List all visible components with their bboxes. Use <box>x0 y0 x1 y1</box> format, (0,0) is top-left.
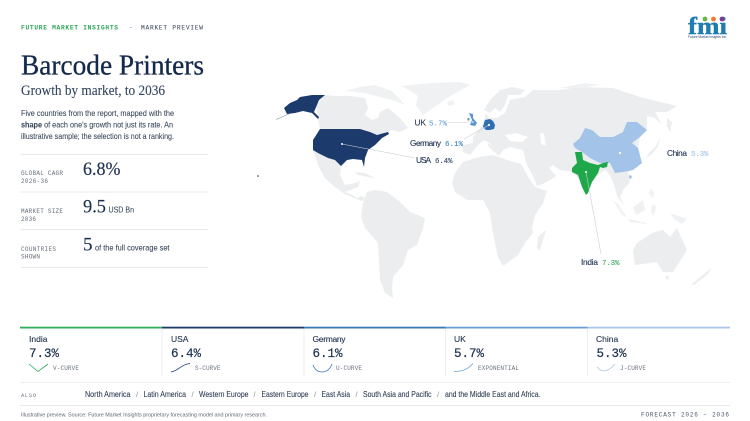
subtitle: Growth by market, to 2036 <box>21 83 165 99</box>
also-covered regions row <box>20 382 730 406</box>
intro text: Five countries from the report, mapped with the <box>21 109 174 118</box>
base land masses <box>313 87 711 298</box>
stat: countries shown: COUNTRIES <box>21 246 56 253</box>
card: USA <box>162 327 304 372</box>
stat: market size: 9.5 <box>83 196 106 218</box>
card: China: China <box>596 334 618 344</box>
card: UK: UK <box>454 334 466 344</box>
label: Germany <box>410 138 463 149</box>
also-covered regions row: / <box>192 390 194 399</box>
country cards <box>20 327 730 376</box>
card: India <box>20 327 162 372</box>
stat: global cagr: GLOBAL CAGR <box>21 170 63 177</box>
country: Germany <box>483 119 495 130</box>
seas and islands <box>505 133 546 146</box>
card: UK: 5.7% <box>454 347 484 361</box>
country: India <box>572 152 608 195</box>
also-covered regions row: and the Middle East and Africa. <box>445 390 540 399</box>
stat: global cagr: 2026-36 <box>21 178 48 185</box>
stat: global cagr: 6.8% <box>83 159 121 180</box>
stat: countries shown: of the full coverage set <box>95 244 170 252</box>
header eyebrow: FUTURE MARKET INSIGHTS <box>21 24 118 32</box>
card: China: J-CURVE <box>620 365 646 372</box>
also-covered regions row: East Asia <box>322 390 350 399</box>
logo: fmi: Future Market Insights Inc. <box>688 35 727 39</box>
card: USA: 6.4% <box>171 347 201 361</box>
intro text <box>21 109 174 141</box>
card: Germany: 6.1% <box>312 347 343 361</box>
card: Germany <box>304 327 446 372</box>
stat: market size <box>21 196 134 223</box>
label: India <box>581 257 620 268</box>
stat: global cagr <box>21 159 121 185</box>
label: China <box>667 148 709 159</box>
label: Germany: 6.1% <box>445 141 463 149</box>
location dots <box>341 121 621 173</box>
leader lines <box>342 122 601 254</box>
label: Germany: Germany <box>410 138 442 148</box>
card: India: India <box>29 334 48 344</box>
also-covered regions row: ALSO <box>21 392 37 399</box>
header eyebrow <box>21 24 203 32</box>
card: China <box>588 327 730 372</box>
label: China: 5.3% <box>691 151 709 159</box>
also-covered regions row: South Asia and Pacific <box>363 390 432 399</box>
card: USA: S-CURVE <box>195 365 221 372</box>
logo: fmi: fmi <box>688 14 727 40</box>
also-covered regions row: Latin America <box>144 390 186 399</box>
label: USA: 6.4% <box>435 158 453 166</box>
also-covered regions row: Western Europe <box>199 390 249 399</box>
card: Germany: Germany <box>312 334 346 344</box>
stat: countries shown: 5 <box>83 234 92 256</box>
intro text: illustrative sample; the selection is not a ranking. <box>21 132 174 141</box>
card: USA: USA <box>171 334 189 344</box>
card: China: 5.3% <box>596 347 627 361</box>
label: USA: USA <box>416 155 431 165</box>
label: India: India <box>581 257 598 267</box>
header eyebrow: · <box>129 24 133 32</box>
also-covered regions row: / <box>314 390 317 399</box>
world map <box>257 82 711 298</box>
header eyebrow: MARKET PREVIEW <box>141 24 203 32</box>
intro text: shape of each one's growth not just its rate. An <box>21 120 173 130</box>
stat: countries shown: SHOWN <box>21 254 40 260</box>
label: UK: 5.7% <box>429 120 447 128</box>
stat: market size: USD Bn <box>108 206 134 214</box>
card: UK: EXPONENTIAL <box>478 365 519 372</box>
title: Barcode Printers <box>21 50 204 82</box>
card: India: V-CURVE <box>53 365 79 372</box>
card: India: 7.3% <box>29 347 59 361</box>
stat: market size: 2036 <box>21 216 36 223</box>
also-covered regions row: North America <box>85 390 131 399</box>
stat: market size: MARKET SIZE <box>21 208 63 215</box>
stat: countries shown <box>21 234 170 260</box>
label: China: China <box>667 148 687 158</box>
label: UK <box>414 118 447 128</box>
label: India: 7.3% <box>602 260 620 268</box>
also-covered regions row: Eastern Europe <box>262 390 309 399</box>
also-covered regions row: / <box>136 390 139 399</box>
also-covered regions row: / <box>356 390 358 399</box>
arctic land, paler <box>345 82 600 115</box>
country: USA <box>257 95 389 177</box>
label: USA <box>416 155 453 166</box>
card: Germany: U-CURVE <box>336 365 362 372</box>
stats panel <box>21 154 208 268</box>
footer forecast range: FORECAST 2026 – 2036 <box>641 412 729 418</box>
card: UK <box>446 327 588 372</box>
country: UK <box>468 113 477 126</box>
label: UK: UK <box>414 118 426 128</box>
also-covered regions row: / <box>254 390 256 399</box>
country: China <box>573 122 647 179</box>
footer source note: Illustrative preview. Source: Future Market Insights proprietary forecasting model and primary research. <box>21 412 267 418</box>
also-covered regions row: / <box>437 390 440 399</box>
